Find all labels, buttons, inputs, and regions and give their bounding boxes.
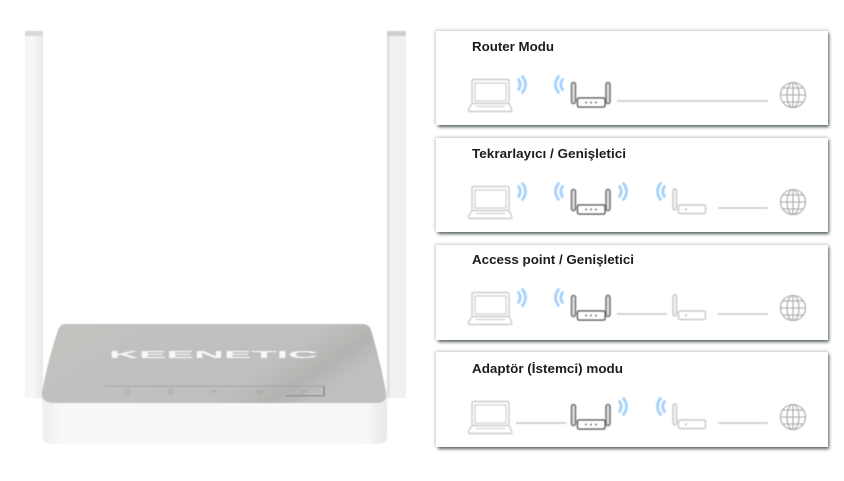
panel card (435, 244, 829, 342)
icon: wifi from first router (658, 184, 664, 200)
icon: wifi from first router (658, 398, 664, 414)
icon: globe (780, 190, 806, 214)
router top cover (42, 324, 386, 403)
router product photo (25, 31, 406, 444)
panel: Access point / Genişletici (435, 244, 829, 342)
icon: laptop (468, 402, 512, 434)
cable to internet (718, 422, 768, 424)
icon: router (572, 404, 610, 429)
KEENETIC logo: KEENETIC (109, 349, 320, 361)
left antenna (25, 31, 43, 398)
icon: router (572, 296, 610, 320)
icon: wifi to router (518, 76, 526, 92)
panel: Tekrarlayıcı / Genişletici (435, 137, 829, 234)
diagram (468, 76, 806, 112)
icon: wifi to second router (620, 398, 626, 414)
icon: laptop (468, 186, 512, 218)
cable to internet (718, 313, 768, 315)
icon: wifi from laptop (556, 76, 562, 92)
panel card (435, 351, 829, 449)
heading: Access point / Genişletici (472, 252, 634, 267)
heading: Router Modu (472, 39, 554, 54)
icon: wifi to router (518, 290, 526, 306)
icon: globe (780, 404, 806, 430)
cable between routers (617, 313, 667, 315)
diagram (468, 184, 806, 218)
icon: globe (780, 296, 806, 320)
icon: wifi from laptop (556, 290, 562, 306)
panel card (435, 30, 829, 127)
cable to internet (718, 207, 768, 209)
icon: wifi from laptop (556, 184, 562, 200)
heading: Adaptör (İstemci) modu (472, 361, 623, 376)
icon: second router (673, 295, 706, 320)
icon: wifi to router (518, 184, 526, 200)
diagram (468, 398, 806, 434)
right antenna (387, 31, 406, 398)
icon: second router (673, 404, 706, 428)
panel: Adaptör (İstemci) modu (435, 351, 829, 449)
icon: wifi to second router (620, 184, 626, 200)
router button strip with status lights (105, 386, 324, 396)
panel: Router Modu (435, 30, 829, 127)
icon: second router (673, 189, 706, 214)
icon: globe (780, 82, 806, 108)
cable laptop to router (516, 422, 566, 424)
icon: laptop (468, 292, 512, 324)
icon: router (572, 82, 610, 107)
heading: Tekrarlayıcı / Genişletici (472, 146, 626, 161)
cable to internet (617, 100, 768, 102)
icon: laptop (468, 80, 512, 112)
icon: router (572, 190, 610, 214)
diagram (468, 290, 806, 324)
panel card (435, 137, 829, 234)
router body (42, 396, 387, 444)
